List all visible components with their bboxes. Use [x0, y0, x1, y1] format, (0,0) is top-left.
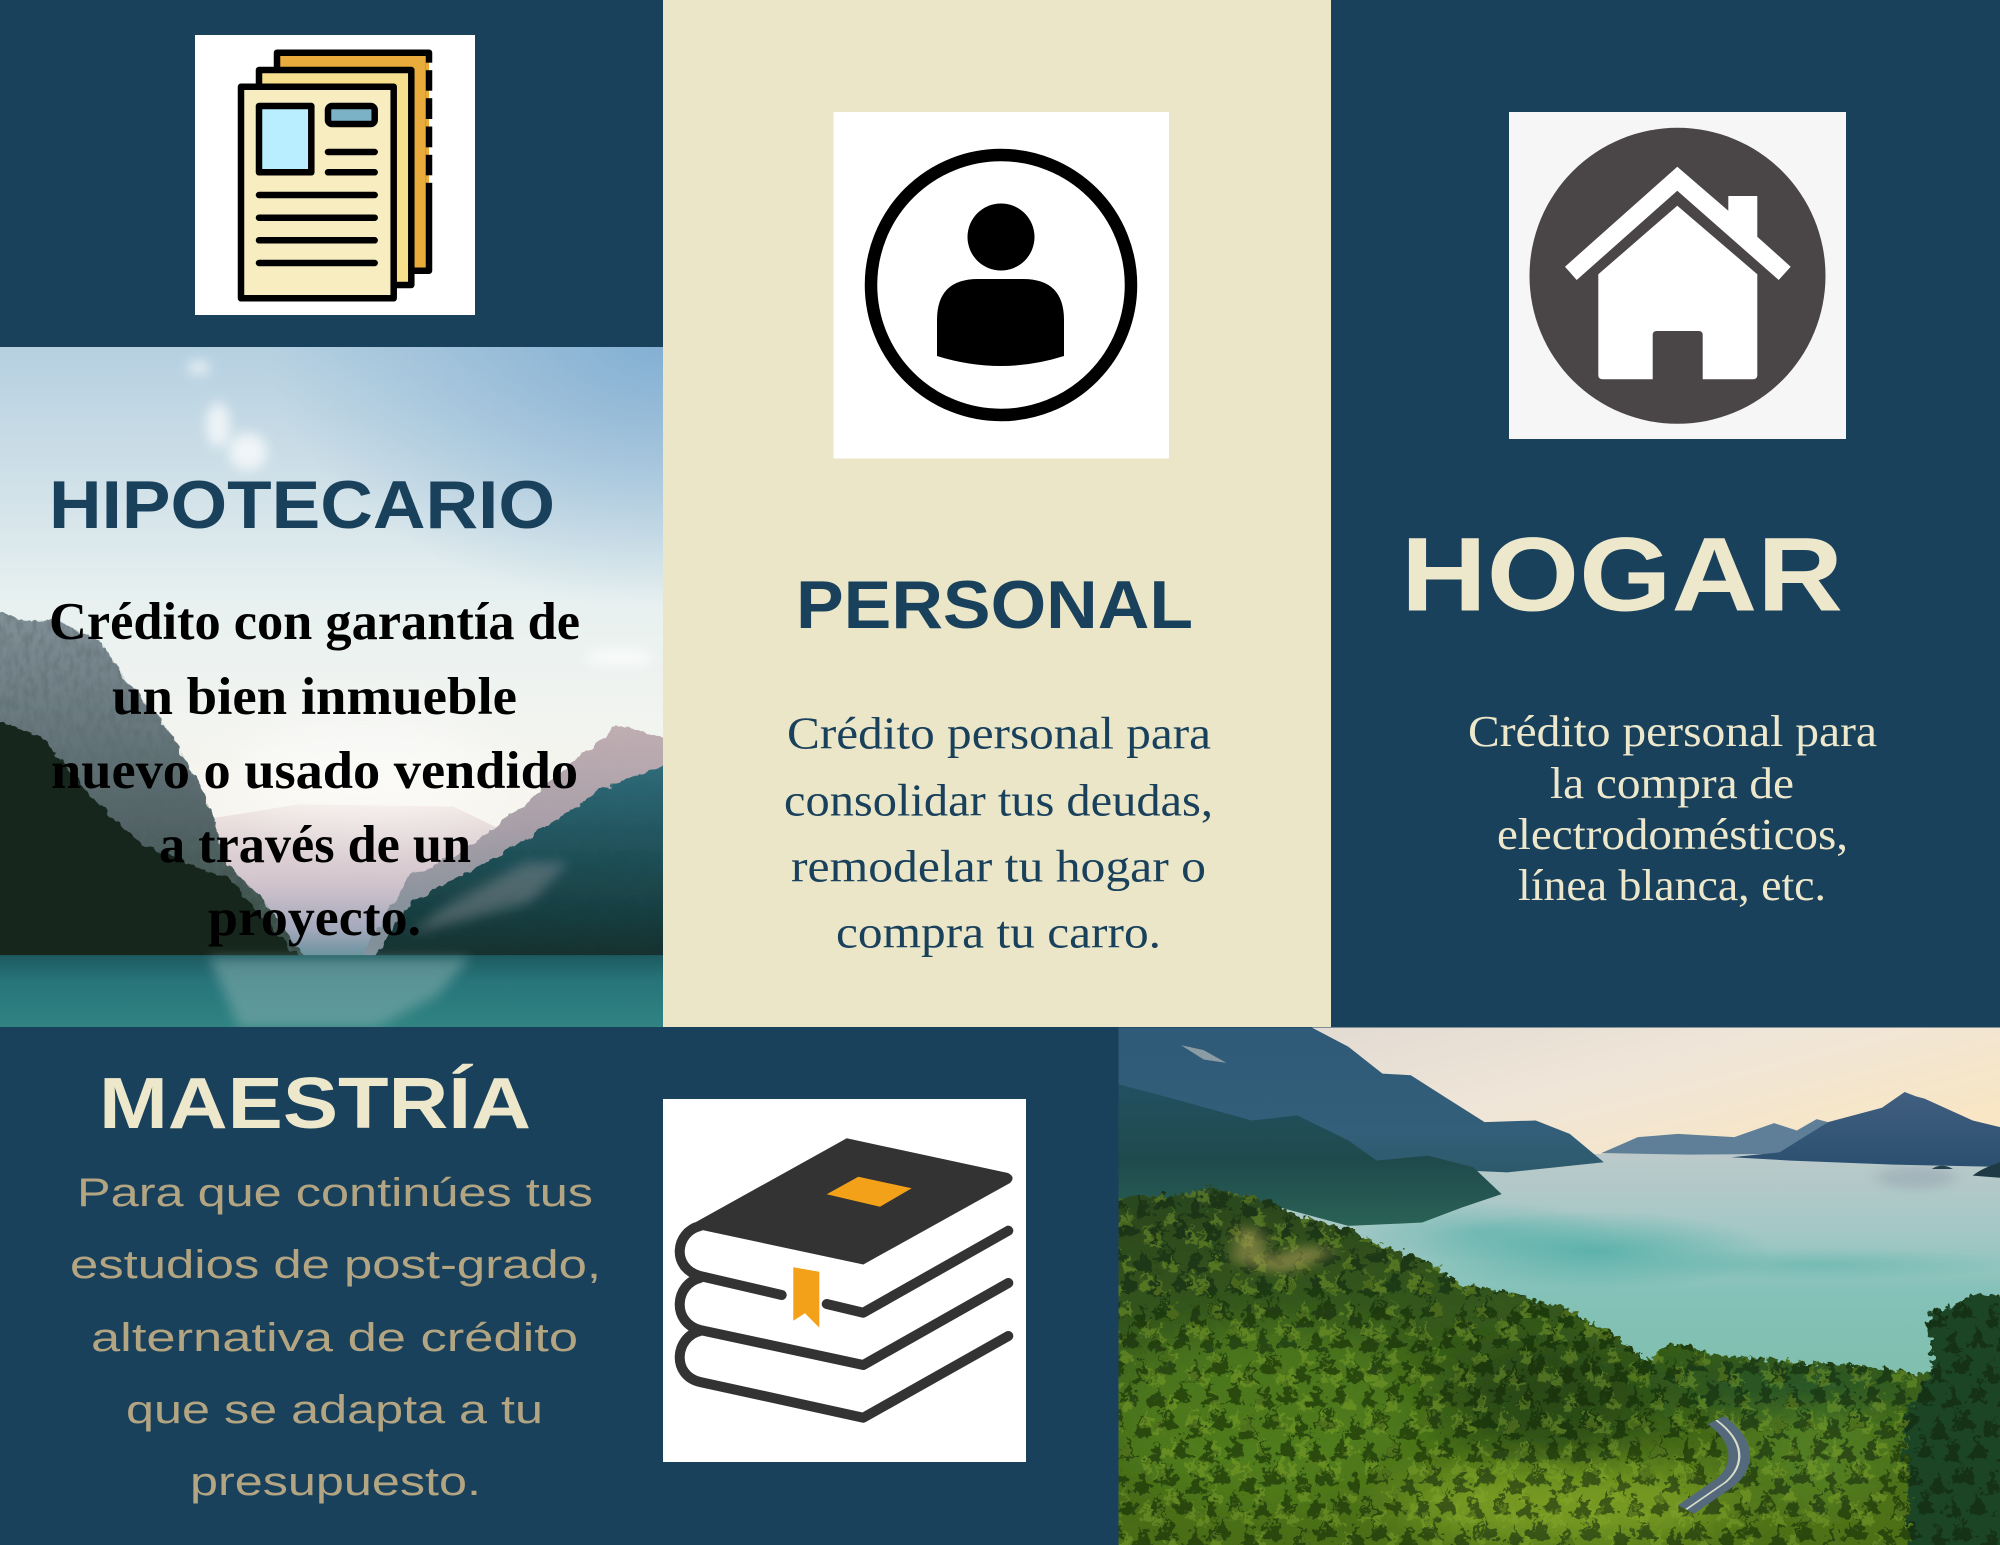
- panel: personal cream column: [663, 0, 1331, 1027]
- text: hipotecario description: Crédito con garantía de: [49, 593, 580, 651]
- text: maestría description: alternativa de crédito: [91, 1316, 578, 1360]
- text: hipotecario description: un bien inmueble: [112, 668, 517, 726]
- icon: documents: [195, 35, 475, 315]
- text: maestría description: que se adapta a tu: [126, 1388, 543, 1432]
- text: hipotecario description: [49, 593, 580, 947]
- text: maestría description: presupuesto.: [190, 1460, 481, 1504]
- panel: forest and lake photo: [1087, 1020, 2000, 1545]
- left mountain: [0, 612, 304, 956]
- icon: house: [1509, 112, 1846, 439]
- heading: hogar: HOGAR: [1401, 516, 1843, 634]
- text: hogar description: Crédito personal para: [1468, 707, 1877, 756]
- right mountain: [364, 725, 663, 955]
- panel: hipotecario mountain photo: [0, 340, 701, 1036]
- heading: maestría: MAESTRÍA: [99, 1064, 531, 1144]
- cliff patches: [1232, 1226, 1337, 1273]
- text: hipotecario description: proyecto.: [208, 889, 421, 947]
- far islands: [1601, 1119, 1828, 1155]
- text: hipotecario description: a través de un: [159, 816, 471, 874]
- text: hogar description: línea blanca, etc.: [1518, 861, 1826, 910]
- text: personal description: Crédito personal para: [787, 708, 1211, 758]
- icon: books: [663, 1099, 1026, 1462]
- distant mountains: [214, 804, 496, 956]
- text: maestría description: Para que continúes tus: [77, 1171, 593, 1215]
- haze over valley: [288, 804, 438, 824]
- text: maestría description: estudios de post-grado,: [70, 1243, 601, 1287]
- right pine: [1893, 1288, 2000, 1545]
- lake: [0, 955, 667, 1031]
- text: personal description: compra tu carro.: [836, 906, 1161, 958]
- text: maestría description: [70, 1171, 601, 1504]
- text: hogar description: [1468, 707, 1877, 910]
- icon: person: [834, 112, 1169, 458]
- heading: hipotecario: HIPOTECARIO: [49, 467, 555, 543]
- text: hogar description: electrodomésticos,: [1497, 810, 1848, 859]
- text: personal description: remodelar tu hogar o: [791, 840, 1206, 892]
- text: personal description: consolidar tus deudas,: [784, 774, 1213, 826]
- left mountain range: [1118, 1028, 1604, 1172]
- text: hipotecario description: nuevo o usado vendido: [51, 742, 578, 800]
- text: personal description: [784, 708, 1213, 958]
- lake: [1282, 1154, 2000, 1376]
- text: hogar description: la compra de: [1550, 759, 1794, 808]
- mid headland: [1110, 1082, 1502, 1226]
- road: [1686, 1420, 1739, 1509]
- heading: personal: PERSONAL: [796, 567, 1193, 643]
- forest: [1118, 1184, 1932, 1545]
